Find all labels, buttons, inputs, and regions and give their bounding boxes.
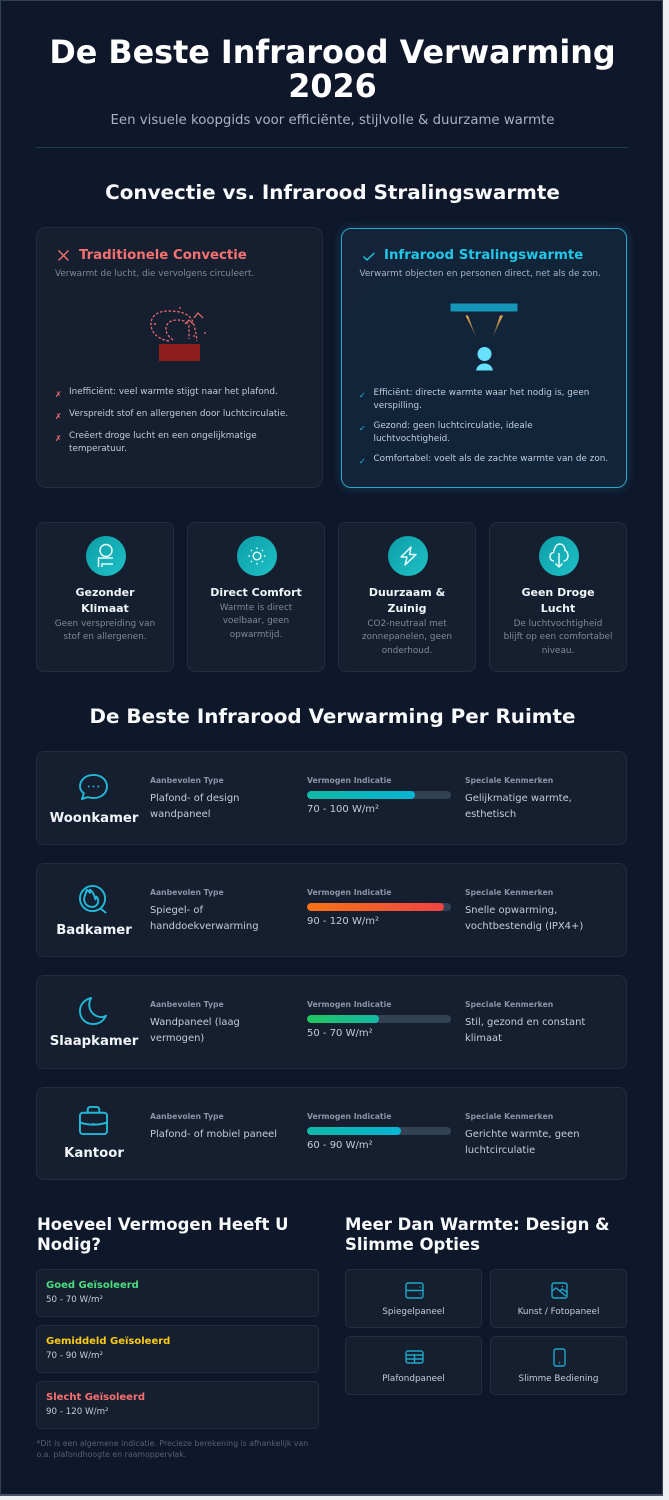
column: aanbevolen type — [150, 888, 259, 932]
heading: convectie vs infrarood: Convectie vs. Infrarood Stralingswarmte — [105, 181, 560, 204]
list: benefits: Gezond: geen luchtcirculatie, ideale — [374, 421, 533, 431]
room card: kantoor — [36, 1087, 627, 1180]
column: aanbevolen type: Plafond- of design — [150, 793, 239, 804]
icon: cloud download — [539, 536, 579, 576]
column: speciale kenmerken: luchtcirculatie — [465, 1145, 535, 1156]
subtitle: Een visuele koopgids voor efficiënte, stijlvolle & duurzame warmte — [111, 113, 554, 128]
design card: kunst fotopaneel — [490, 1269, 627, 1328]
column: speciale kenmerken — [465, 776, 572, 820]
feature text: De luchtvochtigheid — [514, 619, 602, 629]
column: speciale kenmerken: vochtbestendig (IPX4+) — [465, 921, 583, 932]
design card: slimme bediening — [490, 1336, 627, 1395]
icon: search flame — [79, 885, 107, 914]
feature title: Duurzaam & — [369, 586, 445, 599]
feature text: niveau. — [542, 646, 574, 656]
power bar — [307, 1014, 451, 1022]
list: benefits: Efficiënt: directe warmte waar het nodig is, geen — [374, 388, 589, 398]
column: vermogen indicatie: 60 - 90 W/m² — [307, 1140, 373, 1151]
column: speciale kenmerken — [465, 1112, 580, 1156]
column: speciale kenmerken: Speciale Kenmerken — [465, 888, 553, 897]
list: benefits: ✓ — [359, 391, 366, 400]
heading: meer dan warmte — [345, 1214, 610, 1254]
feature title: Direct Comfort — [210, 586, 302, 599]
title: 2026 — [288, 68, 377, 105]
title: De Beste Infrarood Verwarming — [49, 34, 616, 71]
column: speciale kenmerken: esthetisch — [465, 809, 516, 820]
panel heading: Traditionele Convectie — [79, 248, 247, 263]
list: drawbacks: Verspreidt stof en allergenen door luchtcirculatie. — [69, 409, 288, 419]
column: speciale kenmerken: Stil, gezond en constant — [465, 1017, 585, 1028]
feature title — [369, 586, 445, 615]
power card: goed geisoleerd — [36, 1269, 319, 1317]
title — [49, 34, 616, 105]
label: Kunst / Fotopaneel — [518, 1307, 599, 1317]
icon: sun — [237, 536, 277, 576]
heading: meer dan warmte: Meer Dan Warmte: Design & — [345, 1214, 610, 1234]
panel: infrarood stralingswarmte — [341, 228, 627, 488]
power card: gemiddeld geisoleerd: Gemiddeld Geïsoleerd — [46, 1336, 170, 1347]
power card: gemiddeld geisoleerd: 70 - 90 W/m² — [46, 1351, 103, 1361]
feature card: geen droge lucht — [489, 522, 627, 672]
power bar — [307, 790, 451, 798]
column: speciale kenmerken — [465, 888, 583, 932]
feature text: opwarmtijd. — [230, 630, 282, 640]
feature title — [521, 586, 595, 615]
column: vermogen indicatie: Vermogen Indicatie — [307, 888, 391, 897]
power card: goed geisoleerd: Goed Geïsoleerd — [46, 1280, 139, 1291]
column: speciale kenmerken: Speciale Kenmerken — [465, 1000, 553, 1009]
column: speciale kenmerken: Snelle opwarming, — [465, 905, 557, 916]
list: benefits: verspilling. — [374, 401, 422, 411]
list: benefits — [359, 388, 608, 466]
label: Slimme Bediening — [519, 1374, 598, 1384]
room name: Badkamer — [56, 922, 132, 938]
column: speciale kenmerken: Speciale Kenmerken — [465, 1112, 553, 1121]
illustration: convection radiator — [150, 307, 206, 361]
power card: goed geisoleerd: 50 - 70 W/m² — [46, 1295, 103, 1305]
icon: moon — [79, 997, 107, 1025]
label: Spiegelpaneel — [382, 1307, 445, 1317]
feature title — [75, 586, 135, 615]
feature card: direct comfort — [187, 522, 325, 672]
column: vermogen indicatie: 90 - 120 W/m² — [307, 916, 379, 927]
icon: person — [86, 536, 126, 576]
column: aanbevolen type: Aanbevolen Type — [150, 776, 224, 785]
list: benefits: ✓ — [359, 424, 366, 433]
illustration: infrared panel and person — [450, 304, 518, 370]
column: vermogen indicatie — [307, 1000, 451, 1039]
icon: mirror panel — [405, 1282, 424, 1299]
icon: chat bubble — [79, 774, 108, 800]
column: aanbevolen type: handdoekverwarming — [150, 921, 259, 932]
column: vermogen indicatie — [307, 776, 451, 815]
footnote — [36, 1438, 308, 1459]
column: aanbevolen type: Aanbevolen Type — [150, 1112, 224, 1121]
power bar — [307, 1126, 451, 1134]
power card: slecht geisoleerd — [36, 1381, 319, 1429]
room card: woonkamer — [36, 751, 627, 845]
heading: meer dan warmte: Slimme Opties — [345, 1234, 480, 1254]
feature text — [220, 603, 292, 640]
room card: badkamer — [36, 863, 627, 957]
feature title: Klimaat — [81, 602, 129, 615]
room name: Woonkamer — [50, 810, 138, 826]
footnote: *Dit is een algemene indicatie. Precieze berekening is afhankelijk van — [36, 1438, 308, 1448]
feature text: CO2-neutraal met — [367, 619, 447, 629]
feature text: Geen verspreiding van — [55, 619, 155, 629]
column: aanbevolen type — [150, 776, 239, 820]
heading: hoeveel vermogen — [37, 1214, 288, 1254]
column: speciale kenmerken: Speciale Kenmerken — [465, 776, 553, 785]
feature text: blijft op een comfortabel — [504, 632, 612, 642]
room name: Kantoor — [64, 1146, 124, 1161]
feature text: voelbaar, geen — [223, 616, 289, 626]
list: drawbacks: Creëert droge lucht en een ongelijkmatige — [69, 431, 257, 441]
column: vermogen indicatie: Vermogen Indicatie — [307, 1112, 391, 1121]
feature card: gezonder klimaat — [36, 522, 174, 672]
list: drawbacks: Inefficiënt: veel warmte stijgt naar het plafond. — [69, 387, 278, 397]
column: speciale kenmerken: Gelijkmatige warmte, — [465, 793, 572, 804]
column: speciale kenmerken: klimaat — [465, 1033, 502, 1044]
feature title: Zuinig — [387, 602, 427, 615]
feature text — [504, 619, 612, 656]
feature text: stof en allergenen. — [63, 632, 147, 642]
room card: slaapkamer — [36, 975, 627, 1069]
column: speciale kenmerken: Gerichte warmte, geen — [465, 1129, 580, 1140]
icon: ceiling panel — [405, 1350, 424, 1364]
feature text: onderhoud. — [382, 646, 432, 656]
list: benefits: ✓ — [359, 457, 366, 466]
panel description: Verwarmt de lucht, die vervolgens circuleert. — [55, 269, 254, 279]
column: aanbevolen type — [150, 1000, 240, 1044]
label: Plafondpaneel — [382, 1374, 445, 1384]
feature text: zonnepanelen, geen — [362, 632, 452, 642]
column: aanbevolen type: Plafond- of mobiel paneel — [150, 1129, 277, 1140]
column: vermogen indicatie: 50 - 70 W/m² — [307, 1028, 373, 1039]
list: drawbacks: ✗ — [55, 412, 62, 421]
heading: hoeveel vermogen: Nodig? — [37, 1234, 101, 1254]
list: benefits: luchtvochtigheid. — [374, 434, 450, 444]
feature text — [362, 619, 452, 656]
power card: gemiddeld geisoleerd — [36, 1325, 319, 1373]
feature text: Warmte is direct — [220, 603, 292, 613]
column: vermogen indicatie — [307, 1112, 451, 1151]
column: vermogen indicatie: 70 - 100 W/m² — [307, 804, 379, 815]
icon: smartphone — [553, 1348, 566, 1367]
icon: picture — [551, 1282, 568, 1299]
panel heading: Infrarood Stralingswarmte — [384, 248, 583, 263]
list: drawbacks: temperatuur. — [69, 444, 127, 454]
column: aanbevolen type: Aanbevolen Type — [150, 888, 224, 897]
column: aanbevolen type: Wandpaneel (laag — [150, 1017, 240, 1028]
room name: Slaapkamer — [50, 1034, 138, 1049]
footnote: o.a. plafondhoogte en raamoppervlak. — [36, 1450, 186, 1459]
icon: lightning — [388, 536, 428, 576]
feature title: Geen Droge — [521, 586, 595, 599]
column: aanbevolen type: vermogen) — [150, 1033, 204, 1044]
icon: check — [363, 252, 375, 261]
list: drawbacks: ✗ — [55, 434, 62, 443]
heading: per ruimte: De Beste Infrarood Verwarming Per Ruimte — [90, 705, 576, 728]
column: vermogen indicatie: Vermogen Indicatie — [307, 776, 391, 785]
column: aanbevolen type: wandpaneel — [150, 809, 211, 820]
column: aanbevolen type — [150, 1112, 277, 1140]
list: drawbacks: ✗ — [55, 390, 62, 399]
power bar — [307, 902, 451, 910]
heading: hoeveel vermogen: Hoeveel Vermogen Heeft U — [37, 1214, 288, 1234]
column: vermogen indicatie — [307, 888, 451, 927]
column: aanbevolen type: Aanbevolen Type — [150, 1000, 224, 1009]
column: speciale kenmerken — [465, 1000, 586, 1044]
icon: cross — [58, 250, 69, 261]
power card: slecht geisoleerd: 90 - 120 W/m² — [46, 1407, 109, 1417]
feature card: duurzaam en zuinig — [338, 522, 476, 672]
feature title: Gezonder — [75, 586, 135, 599]
list: drawbacks — [55, 387, 288, 454]
panel: traditionele convectie — [36, 227, 323, 488]
design card: plafondpaneel — [345, 1336, 482, 1395]
feature text — [55, 619, 155, 642]
column: vermogen indicatie: Vermogen Indicatie — [307, 1000, 391, 1009]
column: aanbevolen type: Spiegel- of — [150, 905, 203, 916]
power card: slecht geisoleerd: Slecht Geïsoleerd — [46, 1392, 145, 1403]
list: benefits: Comfortabel: voelt als de zachte warmte van de zon. — [374, 454, 608, 464]
feature title: Lucht — [541, 602, 575, 615]
icon: briefcase — [79, 1106, 108, 1135]
panel description: Verwarmt objecten en personen direct, net als de zon. — [360, 269, 601, 279]
design card: spiegelpaneel — [345, 1269, 482, 1328]
